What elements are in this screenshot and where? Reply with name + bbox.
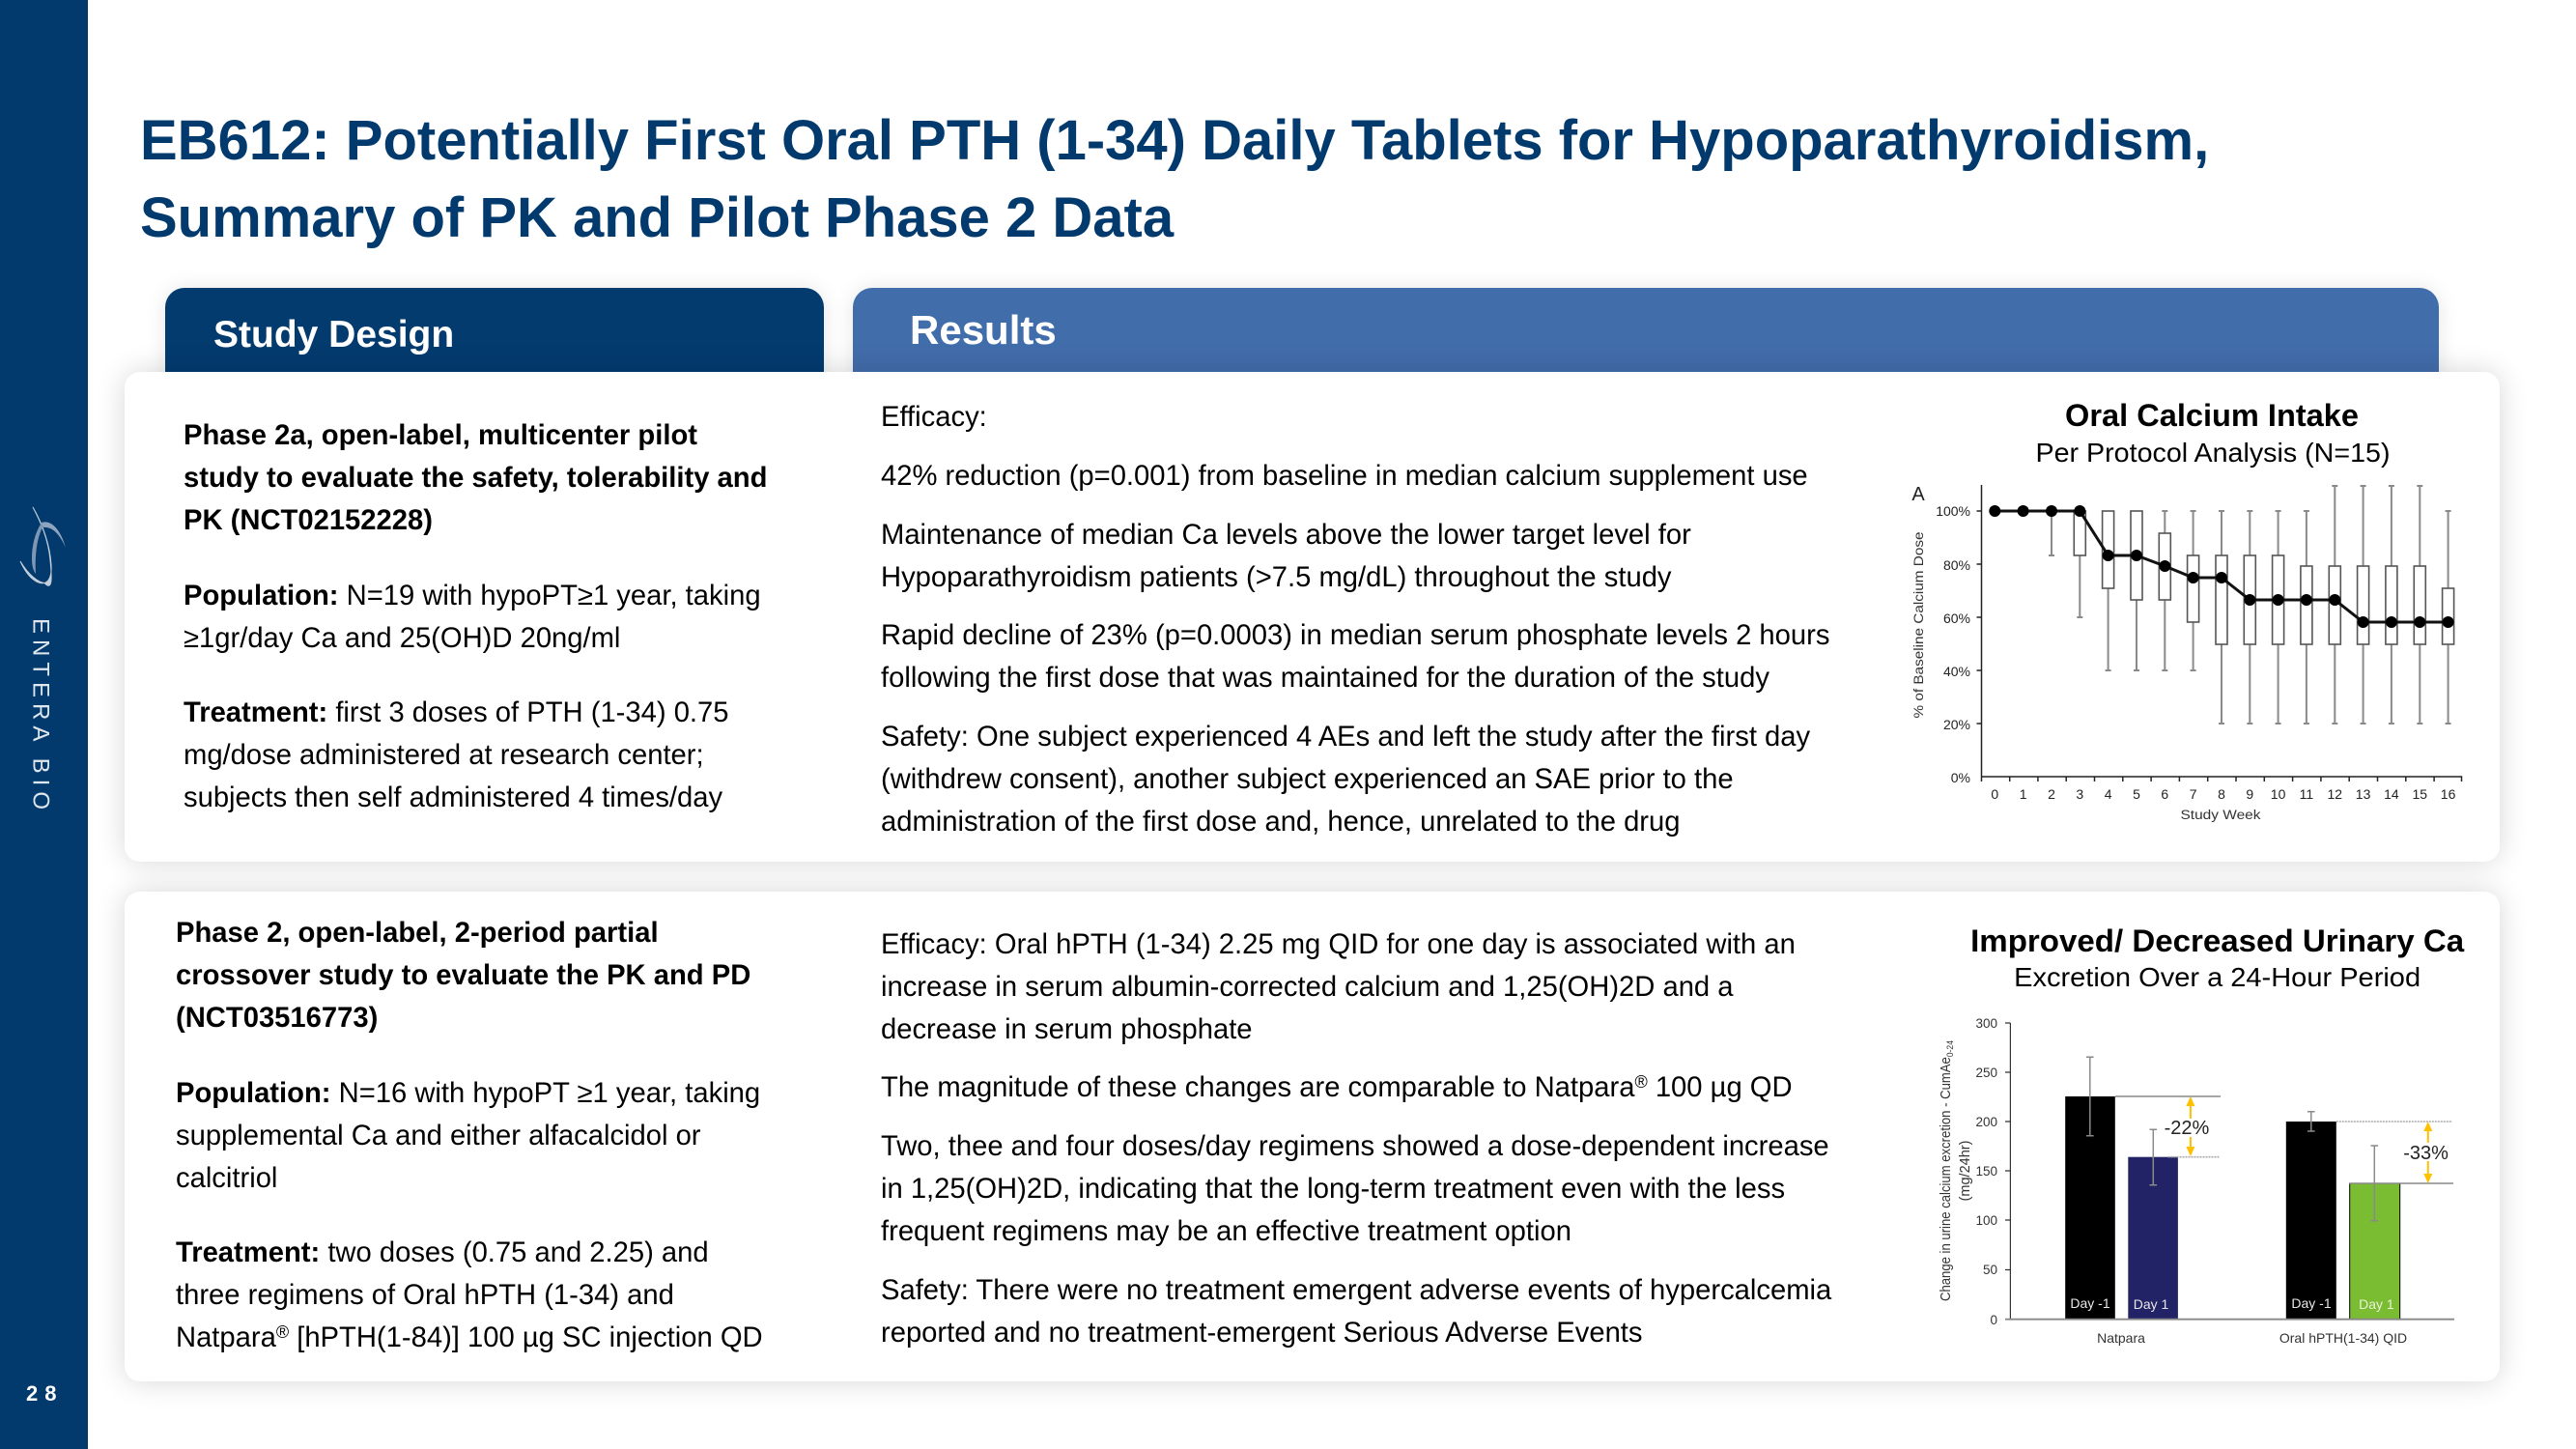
dose dependence: frequent regimens may be an effective treatment option — [881, 1216, 1571, 1247]
y axis labels: 60% — [1943, 611, 1970, 626]
chart title: Improved/ Decreased Urinary Ca — [1970, 923, 2464, 958]
safety: (withdrew consent), another subject experienced an SAE prior to the — [881, 764, 1734, 795]
phosphate decline — [881, 620, 1829, 694]
logo: Entera Bio swoosh — [19, 506, 66, 586]
page number: 28 — [26, 1381, 63, 1406]
population: ≥1gr/day Ca and 25(OH)D 20ng/ml — [184, 623, 620, 654]
dose dependence: Two, thee and four doses/day regimens showed a dose-dependent increase — [881, 1131, 1829, 1162]
dose dependence: in 1,25(OH)2D, indicating that the long-term treatment even with the less — [881, 1174, 1785, 1205]
sidebar — [0, 0, 88, 1449]
x axis labels: 10 — [2271, 786, 2286, 802]
treatment: Treatment: two doses (0.75 and 2.25) and — [176, 1237, 709, 1268]
median markers — [1989, 505, 2454, 628]
calcium levels: Hypoparathyroidism patients (>7.5 mg/dL) throughout the study — [881, 562, 1672, 593]
bar labels: Day 1 — [2134, 1296, 2168, 1312]
study description: crossover study to evaluate the PK and PD — [176, 960, 750, 991]
study description: study to evaluate the safety, tolerability and — [184, 463, 767, 494]
panel letter: A — [1911, 484, 1925, 505]
chart title: Oral Calcium Intake — [2065, 398, 2359, 433]
panel: phase 2a study — [125, 372, 2500, 862]
axes — [1976, 485, 2461, 781]
reference lines — [2115, 1096, 2453, 1183]
x axis title: Study Week — [2181, 808, 2261, 822]
title: EB612: Potentially First Oral PTH (1-34) Daily Tablets for Hypoparathyroidism, — [140, 109, 2209, 172]
y axis labels: 0% — [1951, 770, 1970, 785]
x axis labels: 16 — [2441, 786, 2456, 802]
treatment — [176, 1237, 763, 1353]
y axis labels: 40% — [1943, 664, 1970, 679]
x axis labels: 11 — [2300, 786, 2313, 802]
y axis labels: 250 — [1975, 1065, 1997, 1080]
treatment: subjects then self administered 4 times/day — [184, 782, 722, 813]
x axis labels: 9 — [2246, 786, 2253, 802]
chart subtitle: Excretion Over a 24-Hour Period — [2014, 962, 2420, 992]
y axis labels: 50 — [1983, 1263, 1997, 1277]
x axis labels: 1 — [2020, 786, 2027, 802]
baseline — [2005, 1319, 2454, 1321]
treatment — [184, 697, 728, 813]
y axis title: % of Baseline Calcium Dose — [1911, 531, 1926, 719]
bar labels: Day 1 — [2359, 1296, 2394, 1312]
study description: PK (NCT02152228) — [184, 505, 433, 536]
population: calcitriol — [176, 1163, 277, 1194]
percent labels — [2165, 1118, 2449, 1164]
text: phase 2 design — [176, 918, 763, 1353]
study description: (NCT03516773) — [176, 1003, 378, 1034]
efficacy heading: Efficacy: — [881, 402, 987, 433]
group labels — [2097, 1330, 2407, 1346]
x axis labels: 5 — [2133, 786, 2140, 802]
x axis labels: 0 — [1991, 786, 1998, 802]
whiskers — [2049, 486, 2451, 724]
y axis title: 0-24 — [1945, 1040, 1956, 1057]
group labels: Oral hPTH(1-34) QID — [2279, 1330, 2407, 1346]
y axis labels — [1975, 1016, 1997, 1327]
heading: results: Results — [910, 307, 1057, 353]
study description: Phase 2, open-label, 2-period partial — [176, 918, 659, 949]
treatment: mg/dose administered at research center; — [184, 740, 704, 771]
treatment: Treatment: first 3 doses of PTH (1-34) 0.75 — [184, 697, 728, 728]
text: phase 2 results — [881, 929, 1831, 1349]
title — [140, 109, 2209, 249]
tab: results — [853, 288, 2439, 384]
error bars — [2086, 1057, 2378, 1221]
calcium levels — [881, 520, 1691, 593]
bar labels: Day -1 — [2291, 1295, 2332, 1311]
efficacy: decrease in serum phosphate — [881, 1014, 1253, 1045]
heading: study design: Study Design — [213, 314, 454, 355]
x axis labels: 2 — [2048, 786, 2055, 802]
study description: Phase 2a, open-label, multicenter pilot — [184, 420, 697, 451]
population: supplemental Ca and either alfacalcidol or — [176, 1121, 701, 1151]
bar labels: Day -1 — [2070, 1295, 2110, 1311]
population — [176, 1078, 760, 1194]
calcium reduction: 42% reduction (p=0.001) from baseline in median calcium supplement use — [881, 461, 1808, 492]
group labels: Natpara — [2097, 1330, 2145, 1346]
safety: reported and no treatment-emergent Serious Adverse Events — [881, 1318, 1643, 1349]
y axis title: Change in urine calcium excretion - CumAe — [1939, 1031, 1954, 1301]
panel: phase 2 study — [125, 892, 2500, 1381]
dotted reference lines — [2167, 1122, 2452, 1157]
text: phase 2a results — [881, 402, 1829, 838]
safety — [881, 722, 1810, 838]
x axis labels: 8 — [2218, 786, 2225, 802]
arrows — [2186, 1096, 2432, 1183]
safety: administration of the first dose and, hence, unrelated to the drug — [881, 807, 1681, 838]
text: phase 2a design — [184, 420, 767, 813]
x axis labels: 15 — [2413, 786, 2427, 802]
study description — [176, 918, 750, 1034]
x axis labels: 14 — [2384, 786, 2399, 802]
comparison to natpara: The magnitude of these changes are comparable to Natpara® 100 µg QD — [881, 1072, 1793, 1103]
y axis labels: 80% — [1943, 557, 1970, 573]
treatment: three regimens of Oral hPTH (1-34) and — [176, 1280, 674, 1311]
safety: Safety: There were no treatment emergent adverse events of hypercalcemia — [881, 1275, 1831, 1306]
y axis unit: (mg/24hr) — [1958, 1141, 1973, 1201]
x axis labels: 3 — [2076, 786, 2083, 802]
calcium levels: Maintenance of median Ca levels above the lower target level for — [881, 520, 1691, 551]
safety — [881, 1275, 1831, 1349]
boxes — [2074, 511, 2454, 644]
dose dependence — [881, 1131, 1829, 1247]
chart: oral calcium intake box plot — [1911, 398, 2463, 822]
brand name: ENTERA BIO — [27, 618, 54, 810]
title: Summary of PK and Pilot Phase 2 Data — [140, 186, 1174, 249]
x axis labels — [1991, 786, 2456, 802]
axes — [2005, 1023, 2010, 1320]
chart subtitle: Per Protocol Analysis (N=15) — [2036, 438, 2390, 468]
x axis labels: 13 — [2356, 786, 2371, 802]
x axis labels: 6 — [2161, 786, 2168, 802]
efficacy: increase in serum albumin-corrected calcium and 1,25(OH)2D and a — [881, 972, 1734, 1003]
population — [184, 581, 761, 654]
x axis labels: 4 — [2105, 786, 2112, 802]
percent labels: -33% — [2403, 1143, 2449, 1164]
chart: urinary calcium bar chart — [1939, 923, 2465, 1346]
y axis labels — [1936, 503, 1970, 785]
y axis labels: 200 — [1975, 1115, 1997, 1129]
x axis labels: 7 — [2190, 786, 2197, 802]
y axis labels: 20% — [1943, 717, 1970, 732]
population: Population: N=16 with hypoPT ≥1 year, taking — [176, 1078, 760, 1109]
efficacy: Efficacy: Oral hPTH (1-34) 2.25 mg QID for one day is associated with an — [881, 929, 1796, 960]
phosphate decline: following the first dose that was maintained for the duration of the study — [881, 663, 1769, 694]
y axis labels: 300 — [1975, 1016, 1997, 1031]
percent labels: -22% — [2165, 1118, 2210, 1139]
population: Population: N=19 with hypoPT≥1 year, taking — [184, 581, 761, 611]
y axis labels: 100% — [1936, 503, 1970, 519]
efficacy — [881, 929, 1796, 1045]
median line — [1995, 511, 2449, 622]
tab: study design — [165, 288, 824, 384]
study description — [184, 420, 767, 536]
y axis labels: 150 — [1975, 1164, 1997, 1179]
safety: Safety: One subject experienced 4 AEs and left the study after the first day — [881, 722, 1810, 753]
bar labels — [2070, 1295, 2394, 1312]
y axis labels: 100 — [1975, 1213, 1997, 1228]
phosphate decline: Rapid decline of 23% (p=0.0003) in median serum phosphate levels 2 hours — [881, 620, 1829, 651]
y axis labels: 0 — [1990, 1313, 1997, 1327]
treatment: Natpara® [hPTH(1-84)] 100 µg SC injection QD — [176, 1322, 763, 1353]
bars — [2065, 1096, 2400, 1320]
x axis labels: 12 — [2328, 786, 2342, 802]
